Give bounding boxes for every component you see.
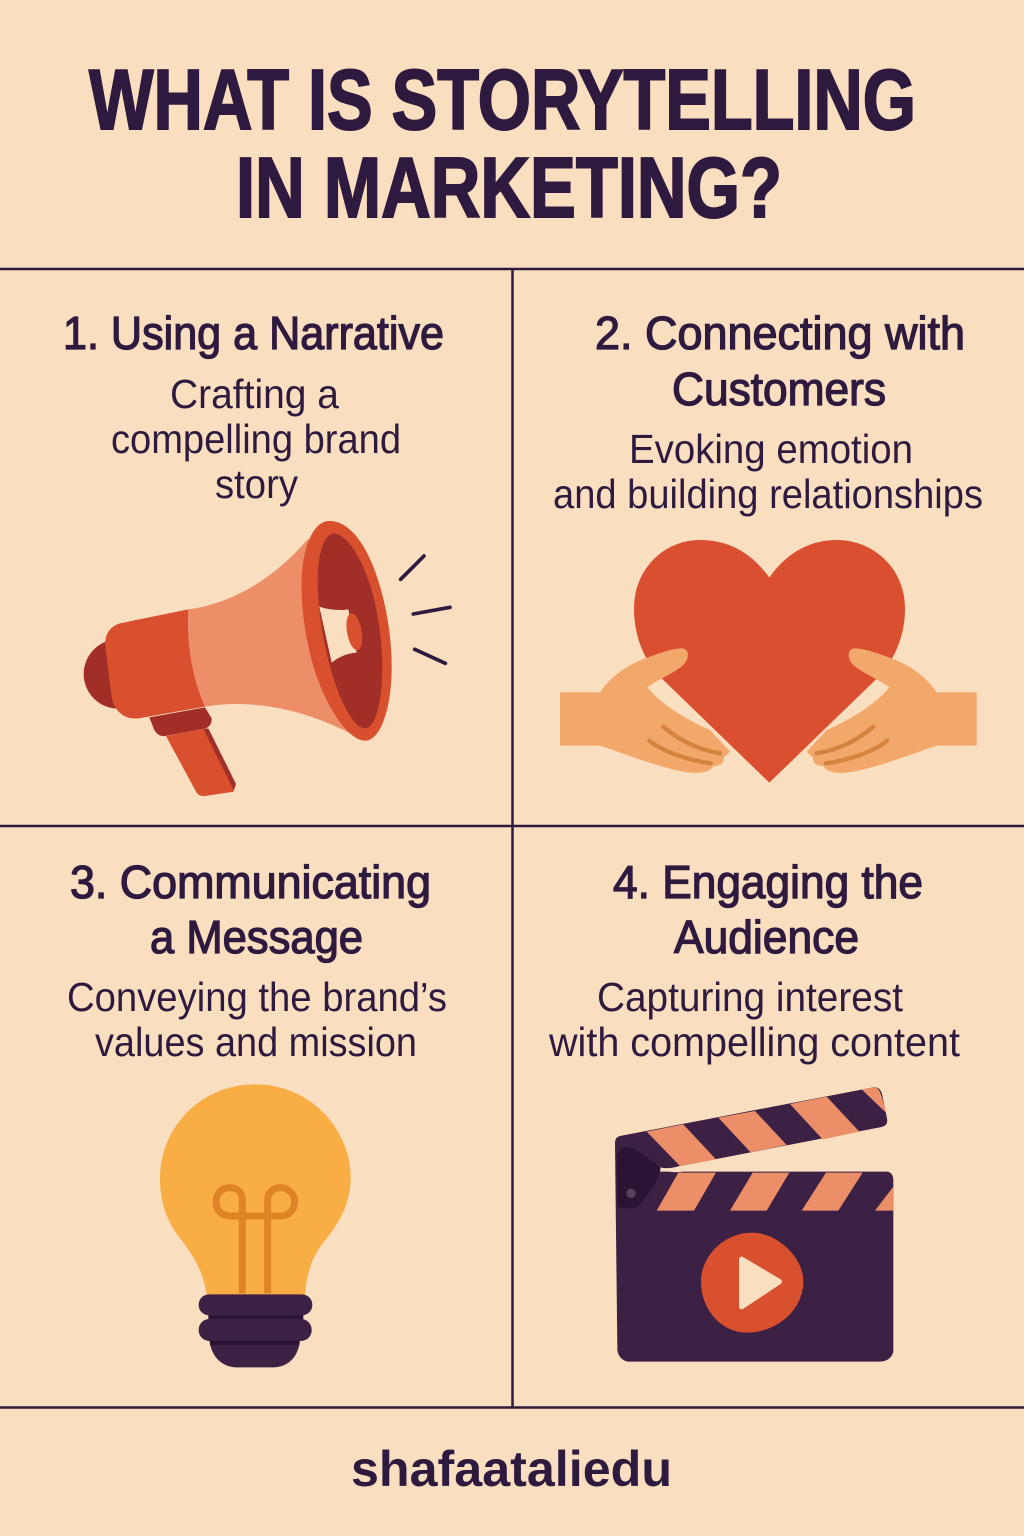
heading: connecting with customers: Customers bbox=[672, 363, 886, 415]
heading: communicating a message bbox=[70, 856, 431, 963]
text: conveying values: Conveying the brand’s bbox=[67, 974, 447, 1020]
title: IN MARKETING? bbox=[236, 141, 782, 236]
text: evoking emotion: and building relationships bbox=[553, 471, 983, 517]
panel: using a narrative bbox=[63, 307, 450, 796]
text: conveying values: values and mission bbox=[95, 1019, 417, 1065]
heading: using a narrative: 1. Using a Narrative bbox=[63, 307, 444, 359]
heading: communicating a message: a Message bbox=[150, 911, 363, 963]
icon: megaphone bbox=[84, 521, 450, 796]
text: capturing interest: with compelling content bbox=[548, 1019, 961, 1065]
text: crafting a compelling brand story: compelling brand bbox=[111, 416, 401, 462]
panel: communicating a message bbox=[67, 856, 447, 1367]
heading: connecting with customers: 2. Connecting with bbox=[595, 307, 965, 359]
heading: engaging the audience bbox=[613, 856, 923, 963]
text: crafting a compelling brand story: story bbox=[215, 461, 298, 507]
text: crafting a compelling brand story: Crafting a bbox=[170, 371, 339, 417]
icon: light bulb bbox=[160, 1084, 351, 1367]
panel: connecting with customers bbox=[553, 307, 983, 783]
heading: engaging the audience: 4. Engaging the bbox=[613, 856, 923, 908]
heading: communicating a message: 3. Communicating bbox=[70, 856, 431, 908]
title bbox=[89, 53, 916, 236]
text: conveying values bbox=[67, 974, 447, 1065]
panel: engaging the audience bbox=[548, 856, 961, 1362]
heading: engaging the audience: Audience bbox=[674, 911, 859, 963]
text: capturing interest bbox=[548, 974, 961, 1065]
icon: film clapperboard bbox=[615, 1087, 893, 1362]
text: evoking emotion: Evoking emotion bbox=[629, 426, 913, 472]
text: crafting a compelling brand story bbox=[111, 371, 401, 507]
text: capturing interest: Capturing interest bbox=[597, 974, 904, 1020]
icon: heart held by hands bbox=[560, 540, 977, 783]
heading: connecting with customers bbox=[595, 307, 965, 415]
text: evoking emotion bbox=[553, 426, 983, 517]
footer: shafaataliedu: shafaataliedu bbox=[351, 1441, 672, 1497]
